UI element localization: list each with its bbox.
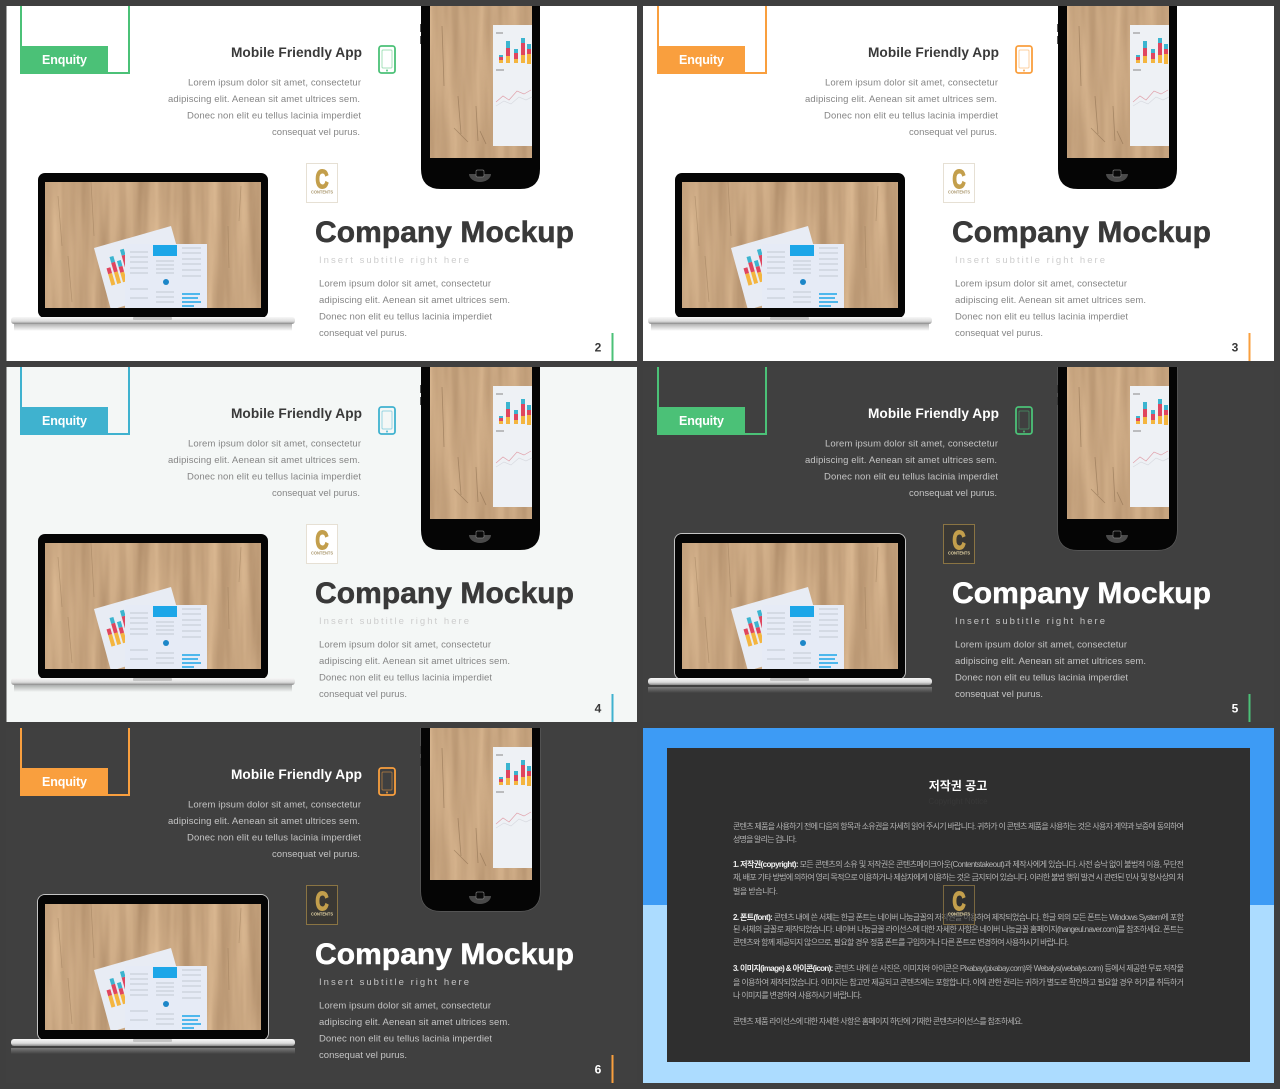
logo [306, 886, 338, 924]
laptop mockup [648, 534, 932, 693]
text block: lower lorem ipsum: Lorem ipsum dolor sit amet, consectetur [319, 640, 491, 650]
heading: mobile friendly app: Mobile Friendly App [231, 767, 362, 782]
text block: lower lorem ipsum [319, 278, 510, 339]
heading: mobile friendly app: Mobile Friendly App [231, 45, 362, 60]
text block: lower lorem ipsum: consequat vel purus. [319, 328, 407, 339]
panel: slide 4 (pale, teal) [6, 367, 637, 722]
text block: upper lorem ipsum: Donec non elit eu tellus lacinia imperdiet [187, 832, 361, 844]
text block: lower lorem ipsum [319, 1000, 510, 1061]
page number [595, 694, 614, 722]
laptop mockup [11, 894, 295, 1054]
enquiry tab [658, 6, 766, 73]
title: Company Mockup [315, 216, 574, 249]
enquiry tab [21, 728, 129, 795]
logo [306, 164, 338, 202]
text block: lower lorem ipsum: Lorem ipsum dolor sit amet, consectetur [955, 640, 1127, 650]
enquiry tab: Enquity [42, 775, 87, 789]
panel: slide 5 (dark, green) [643, 367, 1274, 722]
text block: upper lorem ipsum [168, 438, 361, 499]
text block: lower lorem ipsum: adipiscing elit. Aenean sit amet ultrices sem. [319, 656, 510, 667]
text block: upper lorem ipsum [805, 438, 998, 499]
text block: lower lorem ipsum: Lorem ipsum dolor sit amet, consectetur [955, 278, 1127, 290]
heading: mobile friendly app: Mobile Friendly App [231, 406, 362, 421]
logo: C [316, 525, 329, 555]
text block: lower lorem ipsum [955, 278, 1146, 339]
text block: upper lorem ipsum: consequat vel purus. [272, 127, 360, 138]
text block: upper lorem ipsum: consequat vel purus. [909, 127, 997, 138]
text block: image and icon: 을 이용하여 제작되었습니다. 이미지는 참고만 제공되고 콘텐츠에는 포함합니다. 이에 관한 권리는 귀하가 별도로 확인하고 필요할 경우 허가를 취득하거 [733, 977, 1184, 987]
text block: font: 콘텐츠와 함께 제공되지 않으므로, 필요할 경우 정품 폰트를 구입하거나 다른 폰트로 변경하여 사용하시기 바랍니다. [733, 937, 1069, 947]
logo: CONTENTS [311, 190, 333, 194]
text block: upper lorem ipsum: Lorem ipsum dolor sit amet, consectetur [825, 78, 998, 88]
enquiry tab: Enquity [679, 53, 724, 67]
text block: license: 콘텐츠 제품 라이선스에 대한 자세한 사항은 홈페이지 하단에 기재한 콘텐츠라이선스를 참조하세요. [733, 1016, 1023, 1026]
text block: upper lorem ipsum: consequat vel purus. [272, 488, 360, 499]
page number [595, 333, 614, 361]
text block: lower lorem ipsum: Donec non elit eu tellus lacinia imperdiet [319, 1034, 492, 1044]
enquiry tab [658, 367, 766, 434]
text block: upper lorem ipsum: Lorem ipsum dolor sit amet, consectetur [188, 78, 361, 88]
subtitle: Insert subtitle right here [319, 255, 469, 266]
text block: upper lorem ipsum [168, 800, 361, 860]
text block: font [733, 912, 1185, 947]
title: Company Mockup [952, 216, 1211, 249]
text block: upper lorem ipsum [168, 78, 361, 138]
enquiry tab: Enquity [679, 414, 724, 428]
text block: image and icon: 나 이미지를 변경하여 사용하시기 바랍니다. [733, 990, 862, 1000]
text block: lower lorem ipsum: adipiscing elit. Aenean sit amet ultrices sem. [955, 656, 1146, 667]
page number: 4 [595, 702, 602, 716]
panel: slide 2 (white, green) [6, 6, 637, 361]
text block: font: 2. 폰트(font): 콘텐츠 내에 쓴 서체는 한글 폰트는 네이버 나눔글꼴의 저작권을 이용하여 제작되었습니다. 한글 외의 모든 폰트는 Windows System에 포함 [733, 912, 1185, 922]
text block: lower lorem ipsum [319, 640, 510, 700]
enquiry tab: Enquity [42, 414, 87, 428]
text block: lower lorem ipsum: Lorem ipsum dolor sit amet, consectetur [319, 278, 491, 290]
page number [1232, 333, 1250, 361]
title: Company Mockup [315, 577, 574, 610]
text block: copyright: 1. 저작권(copyright): 모든 콘텐츠의 소유 및 저작권은 콘텐츠메이크아웃(Contentstakeout)과 제작사에게 있습니다. 사전 승낙 없이 불법적 이용, 무단전 [733, 859, 1184, 869]
page number [1232, 694, 1250, 722]
text block: lower lorem ipsum: consequat vel purus. [955, 689, 1043, 700]
enquiry tab [21, 6, 129, 73]
text block: upper lorem ipsum: Lorem ipsum dolor sit amet, consectetur [188, 438, 361, 450]
text block: lower lorem ipsum: consequat vel purus. [319, 1050, 407, 1061]
phone mockup [1057, 367, 1177, 550]
text block: image and icon: 3. 이미지(image) & 아이콘(icon): 콘텐츠 내에 쓴 사진은, 이미지와 아이콘은 Pixabay(pixabay.com)와 Webalys(webalys.com) 등에서 제공한 무료 저작물 [733, 963, 1184, 973]
text block: intro: 성명을 알리는 겁니다. [733, 834, 797, 844]
logo [944, 886, 974, 924]
text block: lower lorem ipsum: Donec non elit eu tellus lacinia imperdiet [319, 672, 492, 684]
heading: mobile friendly app: Mobile Friendly App [868, 45, 999, 60]
icon: phone [379, 407, 395, 434]
notice title: 저작권 공고 [929, 778, 987, 793]
logo: CONTENTS [948, 550, 970, 556]
text block: lower lorem ipsum: adipiscing elit. Aenean sit amet ultrices sem. [319, 1017, 510, 1028]
text block: lower lorem ipsum: adipiscing elit. Aenean sit amet ultrices sem. [319, 295, 510, 306]
text block: upper lorem ipsum [805, 78, 998, 138]
page number: 6 [595, 1062, 602, 1076]
text block: upper lorem ipsum: Donec non elit eu tellus lacinia imperdiet [824, 472, 998, 482]
panel: slide 3 (white, orange) [643, 6, 1274, 361]
icon: phone [379, 768, 395, 795]
text block: upper lorem ipsum: Donec non elit eu tellus lacinia imperdiet [824, 110, 998, 122]
logo [306, 524, 338, 564]
panel: slide 6 (dark, orange) [6, 728, 637, 1083]
laptop mockup [11, 534, 295, 692]
logo: C [952, 886, 966, 916]
title: Company Mockup [315, 938, 574, 971]
text block: upper lorem ipsum: Lorem ipsum dolor sit amet, consectetur [825, 438, 998, 450]
phone mockup [420, 728, 540, 911]
logo: C [316, 164, 329, 194]
text block: upper lorem ipsum: adipiscing elit. Aenean sit amet ultrices sem. [805, 94, 997, 105]
phone mockup [420, 367, 540, 550]
notice subtitle: Copyright Notice [928, 797, 988, 806]
text block: upper lorem ipsum: consequat vel purus. [909, 488, 997, 499]
text block: intro: 콘텐츠 제품을 사용하기 전에 다음의 항목과 소유권을 자세히 읽어 주시기 바랍니다. 귀하가 이 콘텐츠 제품을 사용하는 것은 사용자 계약과 보증에 동의하여 [733, 821, 1184, 831]
logo: CONTENTS [948, 190, 970, 194]
logo: C [952, 525, 966, 555]
text block: lower lorem ipsum: consequat vel purus. [955, 328, 1043, 339]
enquiry tab: Enquity [42, 53, 87, 67]
text block: upper lorem ipsum: Lorem ipsum dolor sit amet, consectetur [188, 800, 361, 810]
icon: phone [1016, 407, 1032, 434]
text block: copyright [733, 859, 1184, 896]
laptop mockup [11, 173, 295, 331]
logo [944, 164, 974, 202]
text block: lower lorem ipsum: Donec non elit eu tellus lacinia imperdiet [955, 672, 1128, 684]
text block: lower lorem ipsum: consequat vel purus. [319, 689, 407, 700]
subtitle: Insert subtitle right here [955, 616, 1105, 627]
text block: lower lorem ipsum: adipiscing elit. Aenean sit amet ultrices sem. [955, 295, 1146, 306]
text block: upper lorem ipsum: adipiscing elit. Aenean sit amet ultrices sem. [168, 455, 360, 466]
title: Company Mockup [952, 577, 1211, 610]
text block: copyright: 벌을 받습니다. [733, 886, 778, 896]
page number [595, 1055, 614, 1083]
text block: intro [733, 821, 1184, 844]
text block: upper lorem ipsum: adipiscing elit. Aenean sit amet ultrices sem. [168, 816, 360, 827]
text block: lower lorem ipsum: Donec non elit eu tellus lacinia imperdiet [319, 312, 492, 322]
logo: CONTENTS [948, 912, 970, 916]
page number: 3 [1232, 340, 1239, 354]
text block: upper lorem ipsum: adipiscing elit. Aenean sit amet ultrices sem. [805, 455, 997, 466]
text block: font: 된 서체의 글꼴로 제작되었습니다. 네이버 나눔글꼴 라이선스에 대한 자세한 사항은 네이버 나눔글꼴 홈페이지(hangeul.naver.com)를 참조하세요. 폰트는 [733, 924, 1184, 934]
page number: 5 [1232, 702, 1239, 716]
text block: upper lorem ipsum: consequat vel purus. [272, 849, 360, 860]
subtitle: Insert subtitle right here [955, 255, 1105, 266]
laptop mockup [648, 173, 932, 331]
logo: CONTENTS [311, 550, 333, 556]
icon: phone [379, 46, 395, 73]
phone mockup [420, 6, 540, 189]
text block: lower lorem ipsum: Donec non elit eu tellus lacinia imperdiet [955, 312, 1128, 322]
text block: upper lorem ipsum: adipiscing elit. Aenean sit amet ultrices sem. [168, 94, 360, 105]
phone mockup [1057, 6, 1177, 189]
logo: C [316, 886, 329, 916]
subtitle: Insert subtitle right here [319, 616, 469, 627]
page number: 2 [595, 340, 602, 354]
text block: copyright: 재, 배포 기타 방법에 의하여 영리 목적으로 이용하거나 제삼자에게 이용하는 것은 금지되어 있습니다. 이러한 불법 행위 발견 시 관련된 민사 및 형사상의 처 [733, 872, 1184, 882]
logo [944, 524, 974, 564]
panel: copyright notice slide [643, 728, 1274, 1083]
subtitle: Insert subtitle right here [319, 977, 469, 988]
enquiry tab [21, 367, 129, 434]
logo: C [952, 164, 966, 194]
text block: upper lorem ipsum: Donec non elit eu tellus lacinia imperdiet [187, 110, 361, 122]
text block: upper lorem ipsum: Donec non elit eu tellus lacinia imperdiet [187, 472, 361, 482]
text block: lower lorem ipsum: Lorem ipsum dolor sit amet, consectetur [319, 1000, 491, 1012]
text block: image and icon [733, 963, 1184, 1000]
heading: mobile friendly app: Mobile Friendly App [868, 406, 999, 421]
text block: lower lorem ipsum [955, 640, 1146, 700]
icon: phone [1016, 46, 1032, 73]
logo: CONTENTS [311, 912, 333, 916]
